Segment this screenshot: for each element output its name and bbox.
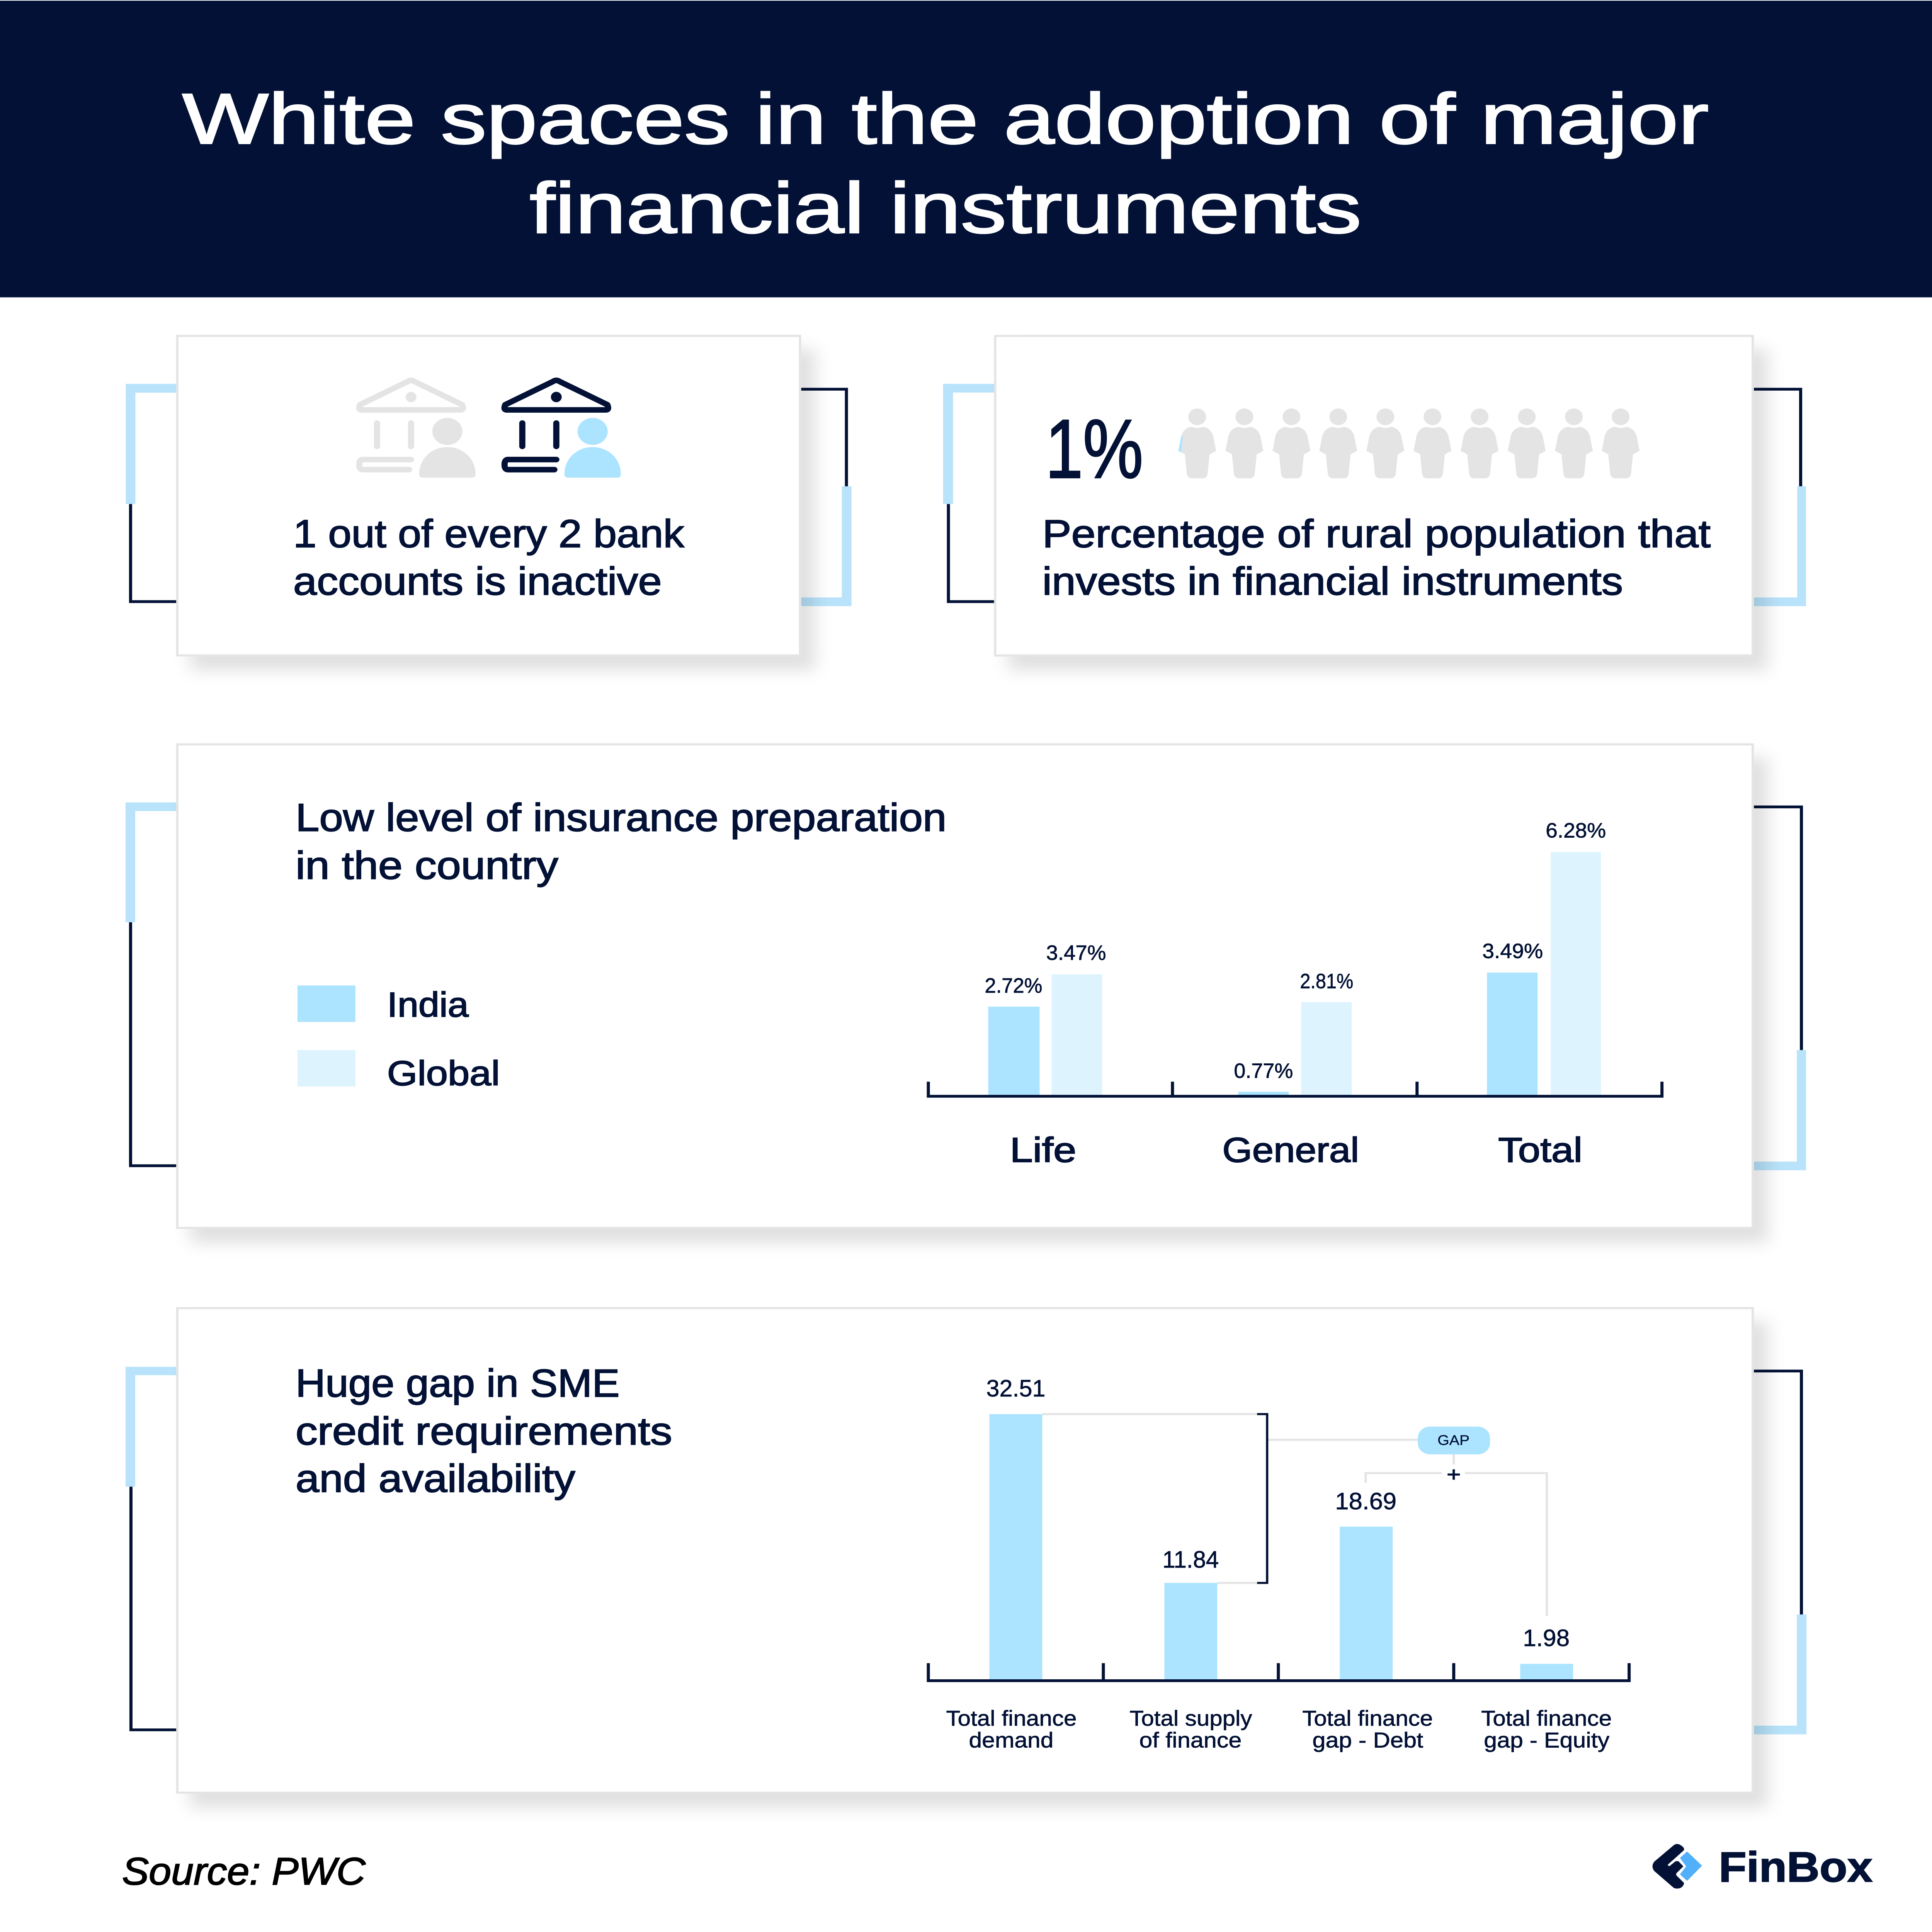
bar chart: finance gap: 11.84 bbox=[1162, 1546, 1219, 1573]
card bbox=[177, 744, 1753, 1228]
panel: insurance preparation bbox=[126, 744, 1806, 1228]
icon: active bank and person bbox=[504, 380, 621, 478]
bar chart: finance gap bbox=[929, 1375, 1629, 1752]
bar chart: insurance: 3.47% bbox=[1046, 941, 1106, 964]
heading: and availability bbox=[296, 1457, 575, 1500]
text: rural population: invests in financial instruments bbox=[1042, 560, 1623, 603]
header band with title bbox=[0, 1, 1932, 298]
plus sign bbox=[1447, 1469, 1460, 1480]
logo: FinBox: FinBox bbox=[1719, 1843, 1872, 1891]
title: White spaces in the adoption of major bbox=[182, 79, 1709, 159]
heading: Huge gap in SME bbox=[296, 1362, 620, 1405]
bar chart: finance gap: 1.98 bbox=[1523, 1624, 1570, 1651]
bar chart: finance gap: demand bbox=[969, 1728, 1053, 1752]
title bbox=[182, 79, 1709, 248]
legend: Global bbox=[387, 1054, 500, 1093]
heading bbox=[296, 796, 947, 887]
bar chart: finance gap: gap - Equity bbox=[1484, 1728, 1610, 1752]
bar chart: insurance: 2.81% bbox=[1300, 969, 1353, 993]
bar chart: insurance: 6.28% bbox=[1546, 819, 1606, 842]
bar chart: finance gap: 32.51 bbox=[986, 1375, 1045, 1401]
bar chart: finance gap: of finance bbox=[1139, 1728, 1242, 1752]
icon: inactive bank and person bbox=[359, 380, 476, 478]
bar chart: insurance: Life bbox=[1010, 1131, 1076, 1170]
legend bbox=[298, 985, 500, 1093]
panel: rural investment bbox=[943, 336, 1806, 655]
panel: SME credit gap bbox=[126, 1308, 1806, 1793]
title: financial instruments bbox=[530, 168, 1361, 248]
bar chart: finance gap: gap - Debt bbox=[1312, 1728, 1423, 1752]
text: inactive accounts bbox=[293, 512, 684, 603]
bracket frame bbox=[126, 803, 1806, 1170]
bar chart: finance gap: Total finance bbox=[1481, 1707, 1612, 1730]
icon: row of ten people bbox=[1178, 408, 1639, 478]
bar chart: finance gap: Total finance bbox=[1302, 1707, 1433, 1730]
bar chart: finance gap: 18.69 bbox=[1335, 1488, 1396, 1514]
bracket frame bbox=[126, 1367, 1806, 1734]
heading: credit requirements bbox=[296, 1410, 672, 1453]
heading: in the country bbox=[296, 844, 559, 887]
bar chart: finance gap: Total finance bbox=[946, 1707, 1077, 1730]
text: inactive accounts: accounts is inactive bbox=[293, 560, 662, 603]
bar chart: insurance: 0.77% bbox=[1234, 1059, 1293, 1083]
card bbox=[177, 1308, 1753, 1793]
bar chart: insurance: 3.49% bbox=[1482, 939, 1543, 963]
logo: FinBox bbox=[1653, 1843, 1872, 1891]
text: rural population: Percentage of rural population that bbox=[1042, 512, 1711, 556]
text: inactive accounts: 1 out of every 2 bank bbox=[293, 512, 684, 556]
heading bbox=[296, 1362, 672, 1500]
source note: Source: PWC bbox=[122, 1850, 366, 1893]
bar chart: insurance: General bbox=[1222, 1131, 1359, 1170]
icon: FinBox mark bbox=[1653, 1844, 1701, 1888]
callout: gap bbox=[1418, 1427, 1490, 1454]
card bbox=[177, 336, 800, 655]
legend: India bbox=[387, 986, 469, 1024]
panel: inactive bank accounts bbox=[126, 336, 852, 655]
stat: 1%: 1% bbox=[1045, 402, 1143, 495]
card bbox=[995, 336, 1753, 655]
bracket frame bbox=[943, 384, 1806, 606]
bar chart: insurance: 2.72% bbox=[985, 974, 1042, 998]
bar chart: insurance bbox=[929, 819, 1662, 1170]
heading: Low level of insurance preparation bbox=[296, 796, 947, 839]
bar chart: insurance: Total bbox=[1498, 1131, 1582, 1170]
bar chart: finance gap: Total supply bbox=[1129, 1707, 1252, 1730]
text: rural population bbox=[1042, 512, 1711, 603]
bracket frame bbox=[126, 384, 852, 606]
callout: gap: GAP bbox=[1437, 1433, 1469, 1448]
